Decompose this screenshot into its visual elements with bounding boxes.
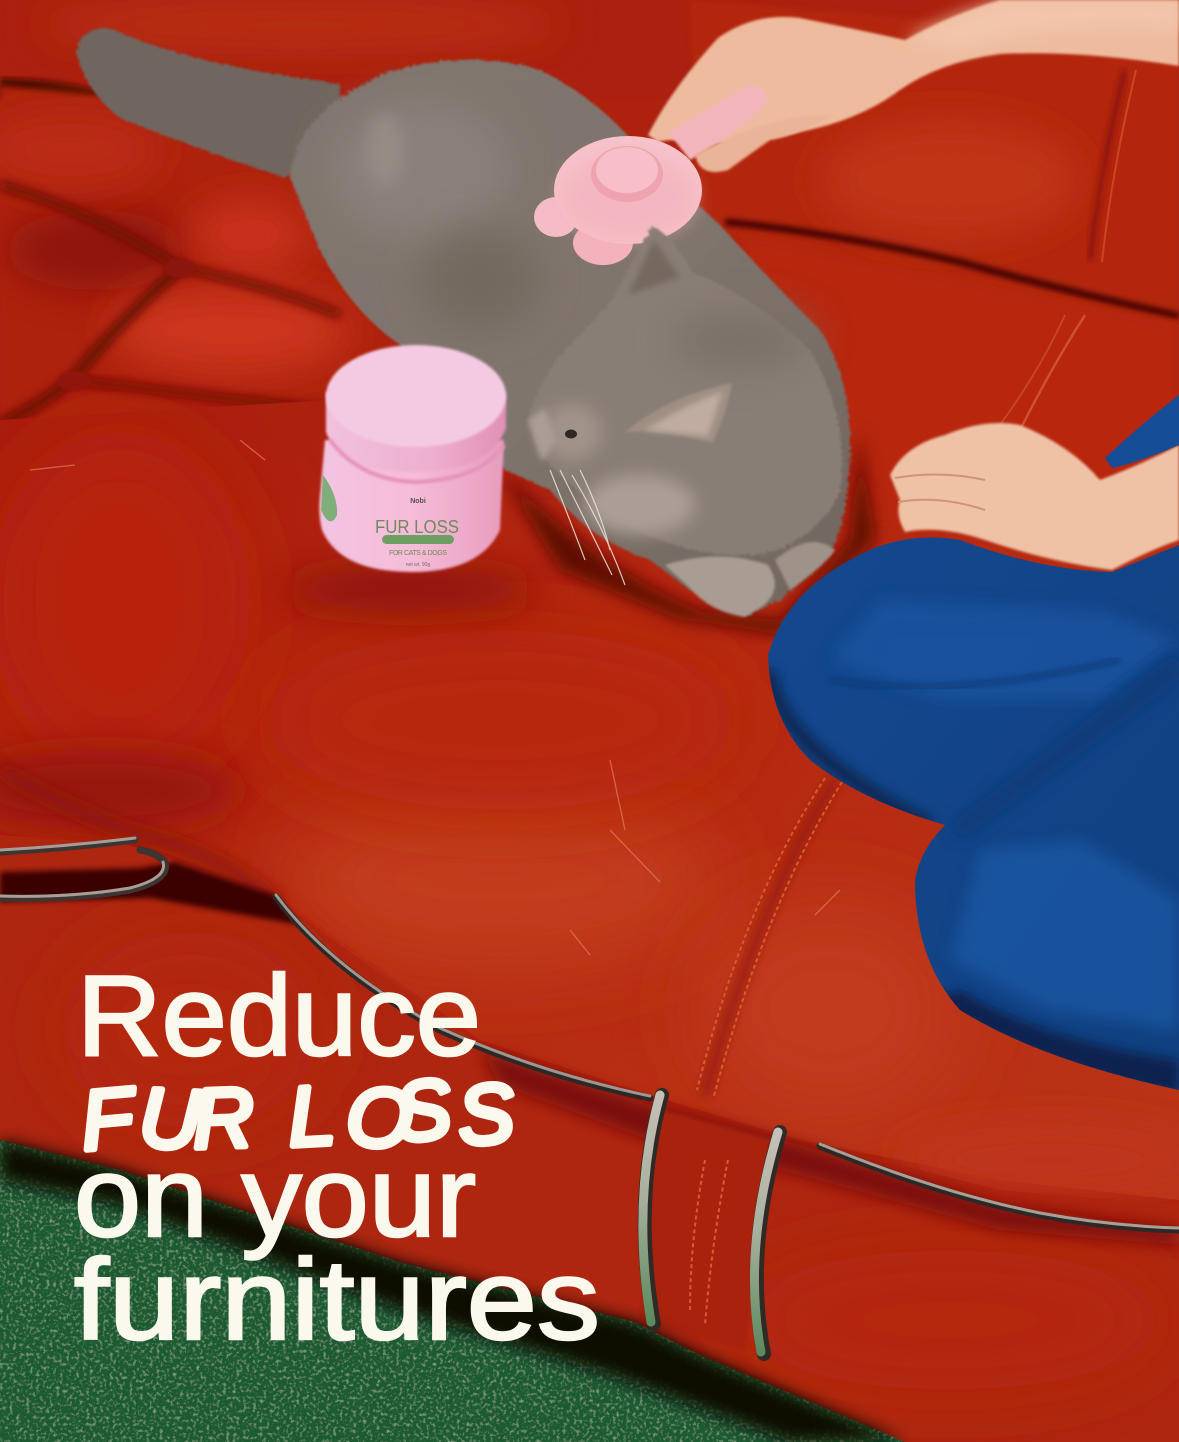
jar label: FUR LOSS — [375, 517, 459, 537]
headline — [74, 953, 600, 1364]
jar side leaf label — [321, 475, 337, 521]
cat front paws — [665, 556, 775, 617]
pink grooming brush — [534, 85, 766, 265]
headline line: Reduce: Reduce — [77, 953, 481, 1080]
tufted left cushion — [0, 86, 400, 430]
cat torso — [290, 59, 850, 616]
back cushion: right — [690, 0, 1179, 330]
seat stitched seam — [697, 778, 842, 1096]
floor shadow under sofa — [0, 1140, 905, 1442]
green floor — [0, 1140, 905, 1442]
lower resting hand — [890, 423, 1179, 570]
headline line: on your: on your — [74, 1134, 476, 1261]
jar lid top — [326, 345, 506, 447]
jar label: FOR CATS & DOGS — [389, 550, 447, 557]
thumb on brush handle — [695, 115, 832, 172]
brush head — [554, 136, 702, 244]
cat shadow — [500, 430, 875, 635]
back cushion: top strip — [0, 0, 1179, 100]
cat body and tail — [76, 28, 875, 635]
cat whiskers — [550, 470, 625, 585]
trouser cuff top right — [1105, 395, 1179, 468]
jar label — [375, 498, 459, 568]
headline line: furnitures: furnitures — [74, 1237, 600, 1364]
cat tail — [76, 28, 340, 178]
cat head — [528, 226, 842, 617]
upper hand holding brush — [648, 0, 1179, 145]
jar label: Nobi — [410, 498, 426, 505]
blue trousers — [768, 395, 1179, 1095]
metal loops around base — [643, 1095, 780, 1354]
jar lid side — [326, 392, 506, 472]
jar label: net wt. 90g — [406, 562, 430, 568]
metal frame rails — [0, 838, 1179, 1230]
main seat cushion — [0, 235, 1179, 1200]
product jar — [319, 345, 506, 572]
brush paw lobes — [534, 197, 578, 237]
cat ear — [625, 383, 732, 443]
brush button — [591, 146, 663, 202]
lower base cushion — [0, 835, 1179, 1442]
trouser legs — [768, 538, 1179, 1090]
brush handle — [668, 85, 766, 160]
headline line: FUR LOSS: FUR LOSS — [77, 1061, 517, 1168]
jar body — [319, 440, 504, 572]
